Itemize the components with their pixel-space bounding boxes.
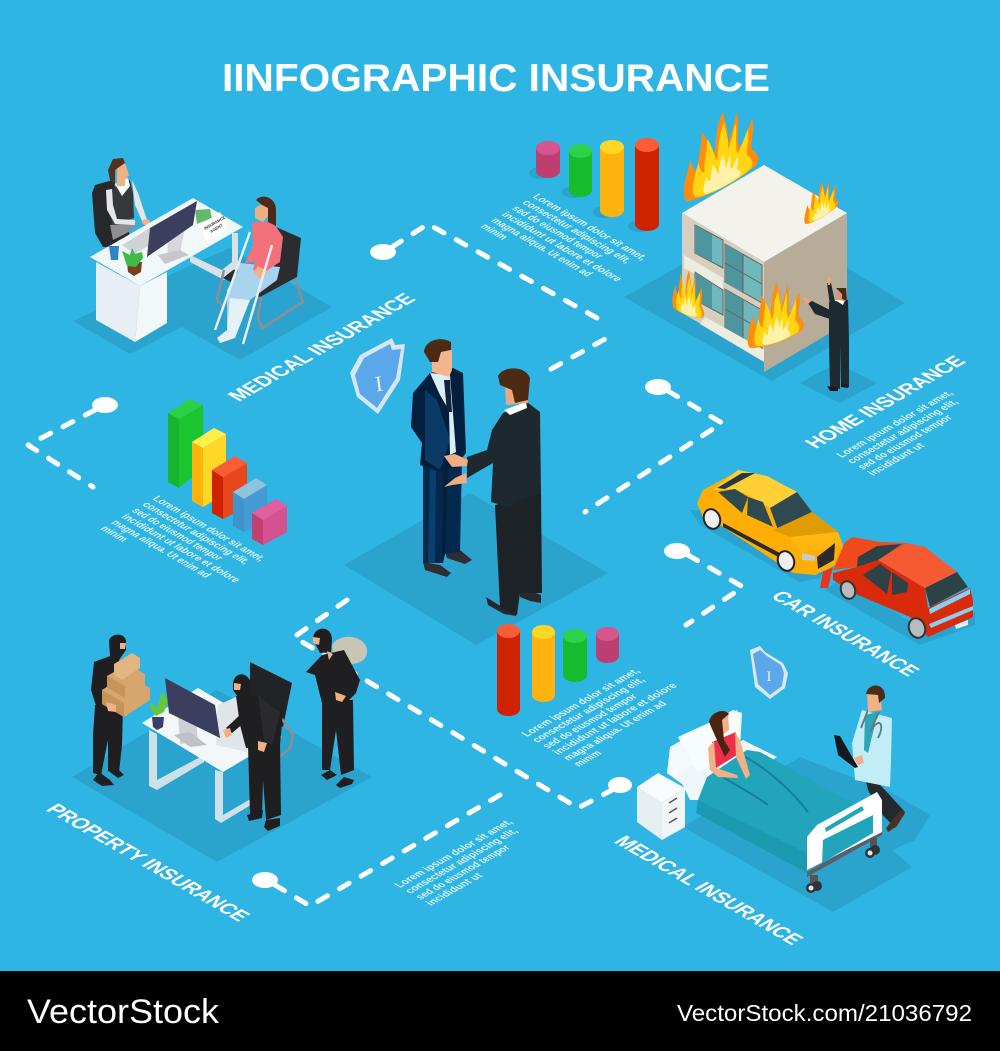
- flame: roof small: [804, 172, 838, 227]
- text block: left: sed do eiusmod tempor: [129, 506, 226, 563]
- sign: insurance agent: [195, 209, 228, 242]
- thief at desk: [223, 674, 283, 831]
- wheels: [806, 838, 880, 893]
- shield: I: [373, 371, 384, 396]
- patient chair: [217, 227, 303, 328]
- patient: [215, 197, 283, 344]
- chart: lower cylinders: [497, 624, 619, 716]
- thief with boxes: [91, 635, 150, 786]
- text block: top: Lorem ipsum dolor sit amet,: [529, 192, 650, 262]
- nightstand: [637, 773, 685, 840]
- agent: [106, 158, 150, 240]
- text block: top: magna aliqua. Ut enim ad: [488, 216, 595, 279]
- small shield: [750, 646, 788, 699]
- text block: centre: incididunt ut labore et dolore: [550, 681, 680, 757]
- flame: base right: [748, 272, 804, 353]
- monitor: [165, 678, 220, 747]
- man watching fire: [802, 277, 849, 391]
- text block: top: minim: [477, 222, 511, 242]
- text block: top: [477, 192, 656, 296]
- floor shadow: [73, 248, 332, 360]
- text block: left: incididunt ut labore et dolore: [118, 512, 243, 585]
- flame: roof large: [684, 93, 758, 208]
- text block: property: consectetur adipiscing elit,: [403, 827, 521, 896]
- text block: property: incididunt ut: [423, 871, 486, 908]
- text block: home: sed do eiusmod tempor: [855, 413, 956, 472]
- desk leg: [190, 233, 238, 280]
- text block: top: sed do eiusmod tempor: [509, 204, 606, 261]
- black suit man: [444, 368, 542, 616]
- panel: home on fire: [624, 93, 905, 403]
- text block: centre: minim: [571, 749, 605, 769]
- text block: left: Lorem ipsum dolor sit amet,: [149, 494, 268, 563]
- label: car insurance: CAR INSURANCE: [766, 588, 924, 680]
- text block: centre: Lorem ipsum dolor sit amet,: [519, 667, 643, 739]
- building: [682, 165, 847, 372]
- footer url: VectorStock.com/21036792: [677, 1000, 972, 1026]
- monitor: [147, 201, 197, 264]
- headboard: [667, 710, 742, 790]
- panel: hospital: [637, 646, 930, 912]
- text block: centre: consectetur adipiscing elit,: [530, 676, 648, 745]
- connector dashes: property to bed: [294, 600, 632, 808]
- label: medical insurance top: MEDICAL INSURANCE: [223, 290, 421, 405]
- mattress: [677, 740, 777, 800]
- label: home insurance: HOME INSURANCE: [800, 353, 971, 452]
- yellow car: [697, 470, 843, 575]
- plant: [122, 248, 143, 276]
- connector dashes: left chart: [28, 397, 118, 487]
- doctor: [834, 685, 905, 832]
- small shield: I: [766, 669, 772, 685]
- text block: left: minim: [97, 524, 131, 544]
- text block: left: magna aliqua. Ut enim ad: [108, 518, 213, 580]
- chart: top cylinders: [529, 138, 659, 232]
- footer bar: [0, 971, 1000, 1051]
- floor shadow: [344, 493, 608, 645]
- text block: centre: sed do eiusmod tempor: [540, 692, 641, 751]
- flame: base left: [672, 265, 704, 321]
- shield: [350, 338, 405, 414]
- text block: top: incididunt ut labore et dolore: [498, 210, 625, 284]
- text block: property: sed do eiusmod tempor: [413, 843, 514, 902]
- text block: home: Lorem ipsum dolor sit amet,: [834, 389, 956, 460]
- panel: cars: [690, 470, 975, 645]
- text block: property: Lorem ipsum dolor sit amet,: [392, 818, 516, 890]
- panel: medical office: [73, 158, 332, 360]
- connector dashes: home to centre: [585, 379, 722, 512]
- floor shadow: [72, 690, 372, 862]
- big chair: [250, 662, 293, 757]
- panel: handshake: [344, 338, 608, 645]
- red car: [820, 537, 973, 641]
- text block: centre: magna aliqua. Ut enim ad: [561, 699, 670, 763]
- desk: [142, 688, 282, 823]
- text block: home: incididunt ut: [865, 441, 928, 478]
- thief with sack: [306, 629, 367, 788]
- sign: insurance agent: INSURANCE: [203, 214, 226, 231]
- label: property insurance: PROPERTY INSURANCE: [41, 801, 255, 925]
- floor shadow: [624, 218, 905, 381]
- sign: insurance agent: AGENT: [209, 222, 224, 234]
- text block: left: consectetur adipiscing elit,: [139, 500, 252, 566]
- label: medical insurance bottom: MEDICAL INSURANCE: [609, 833, 808, 948]
- text block: home: consectetur adipiscing elit,: [845, 398, 962, 466]
- woman patient: [708, 711, 750, 779]
- text block: left: [97, 494, 274, 597]
- connector dashes: car: [664, 543, 743, 625]
- blanket: [698, 750, 853, 853]
- navy man: [411, 339, 472, 577]
- footer brand: VectorStock: [27, 993, 220, 1031]
- papers and keyboard: [216, 697, 247, 752]
- desk top: [90, 198, 243, 286]
- panel: property theft: [72, 629, 372, 862]
- floor shadow: [683, 757, 930, 912]
- connector dashes: property label: [252, 795, 500, 906]
- text block: centre: [519, 663, 701, 769]
- connector dashes: medical office to home: [370, 224, 614, 369]
- plant: [150, 692, 168, 730]
- pillow: [678, 710, 740, 773]
- pedestal: [96, 262, 140, 342]
- pen cup: [109, 246, 119, 260]
- keyboard: [122, 228, 150, 254]
- blanket folds: [720, 757, 808, 812]
- chair of agent: [92, 180, 130, 247]
- chart: isometric bars: [168, 399, 287, 545]
- blanket side: [696, 800, 807, 873]
- text block: top: consectetur adipiscing elit,: [519, 198, 634, 265]
- title: IINFOGRAPHIC INSURANCE: [222, 57, 770, 100]
- shadows: [690, 510, 825, 582]
- footboard: [807, 792, 882, 877]
